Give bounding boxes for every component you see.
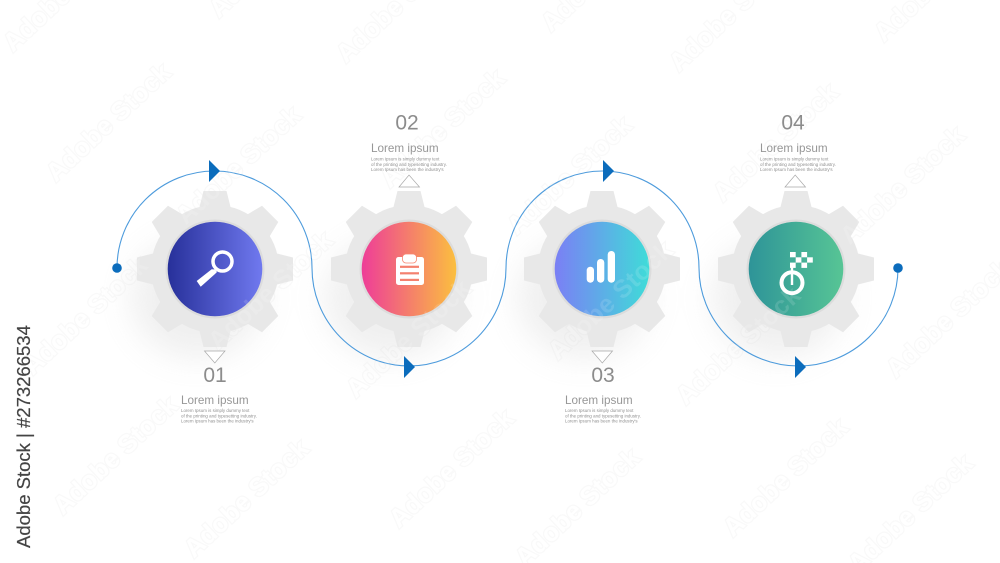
step 02 text: Lorem ipsum [371, 142, 439, 155]
icon: finish flag and target [782, 252, 813, 293]
icon: clipboard [396, 254, 424, 285]
connecting timeline path [117, 171, 898, 366]
step 01 text: Lorem Ipsum has been the industry's [181, 418, 254, 423]
step 01 text: 01 [203, 364, 227, 387]
pointer triangle 4 [785, 175, 806, 187]
end dot [893, 263, 903, 273]
arrowhead: bottom of gear 4 [795, 356, 806, 378]
gear shadows [131, 238, 844, 358]
step 04 text [760, 112, 836, 172]
step 03 text: Lorem Ipsum has been the industry's [565, 418, 638, 423]
gear 3 [524, 191, 680, 347]
step 02 text [371, 112, 447, 172]
step 04 text: Lorem Ipsum is simply dummy text [760, 157, 829, 162]
arrowhead: bottom of gear 2 [404, 356, 415, 378]
step 02 text: Lorem Ipsum is simply dummy text [371, 157, 440, 162]
stock id side label: Adobe Stock | #273266534 [13, 325, 34, 548]
step 03 text [565, 364, 641, 423]
icon: bar chart [587, 251, 615, 283]
step 03 text: of the printing and typesetting industry. [565, 413, 641, 418]
icon: magnifying glass [197, 252, 232, 287]
step 04 text: 04 [781, 112, 805, 134]
step 01 text: Lorem ipsum [181, 394, 249, 407]
step 04 text: Lorem Ipsum has been the industry's [760, 167, 833, 172]
pointer triangle 1 [204, 351, 225, 363]
pointer triangle 3 [592, 351, 612, 363]
step 04 text: Lorem ipsum [760, 142, 828, 155]
gear 2 [331, 191, 487, 347]
pointer triangle 2 [399, 175, 420, 187]
gear 4 [718, 191, 874, 347]
gear 1 [137, 191, 293, 347]
step 02 text: of the printing and typesetting industry. [371, 162, 447, 167]
step 02 text: Lorem Ipsum has been the industry's [371, 167, 444, 172]
step 04 text: of the printing and typesetting industry. [760, 162, 836, 167]
step 03 text: Lorem Ipsum is simply dummy text [565, 408, 634, 413]
step 01 text: Lorem Ipsum is simply dummy text [181, 408, 250, 413]
step 02 text: 02 [395, 112, 419, 134]
step 01 text [181, 364, 257, 423]
step 03 text: 03 [591, 364, 615, 387]
step 01 text: of the printing and typesetting industry. [181, 413, 257, 418]
step 03 text: Lorem ipsum [565, 394, 633, 407]
start dot [112, 263, 122, 273]
arrowhead: top of gear 1 [209, 160, 220, 182]
arrowhead: top of gear 3 [603, 160, 614, 182]
